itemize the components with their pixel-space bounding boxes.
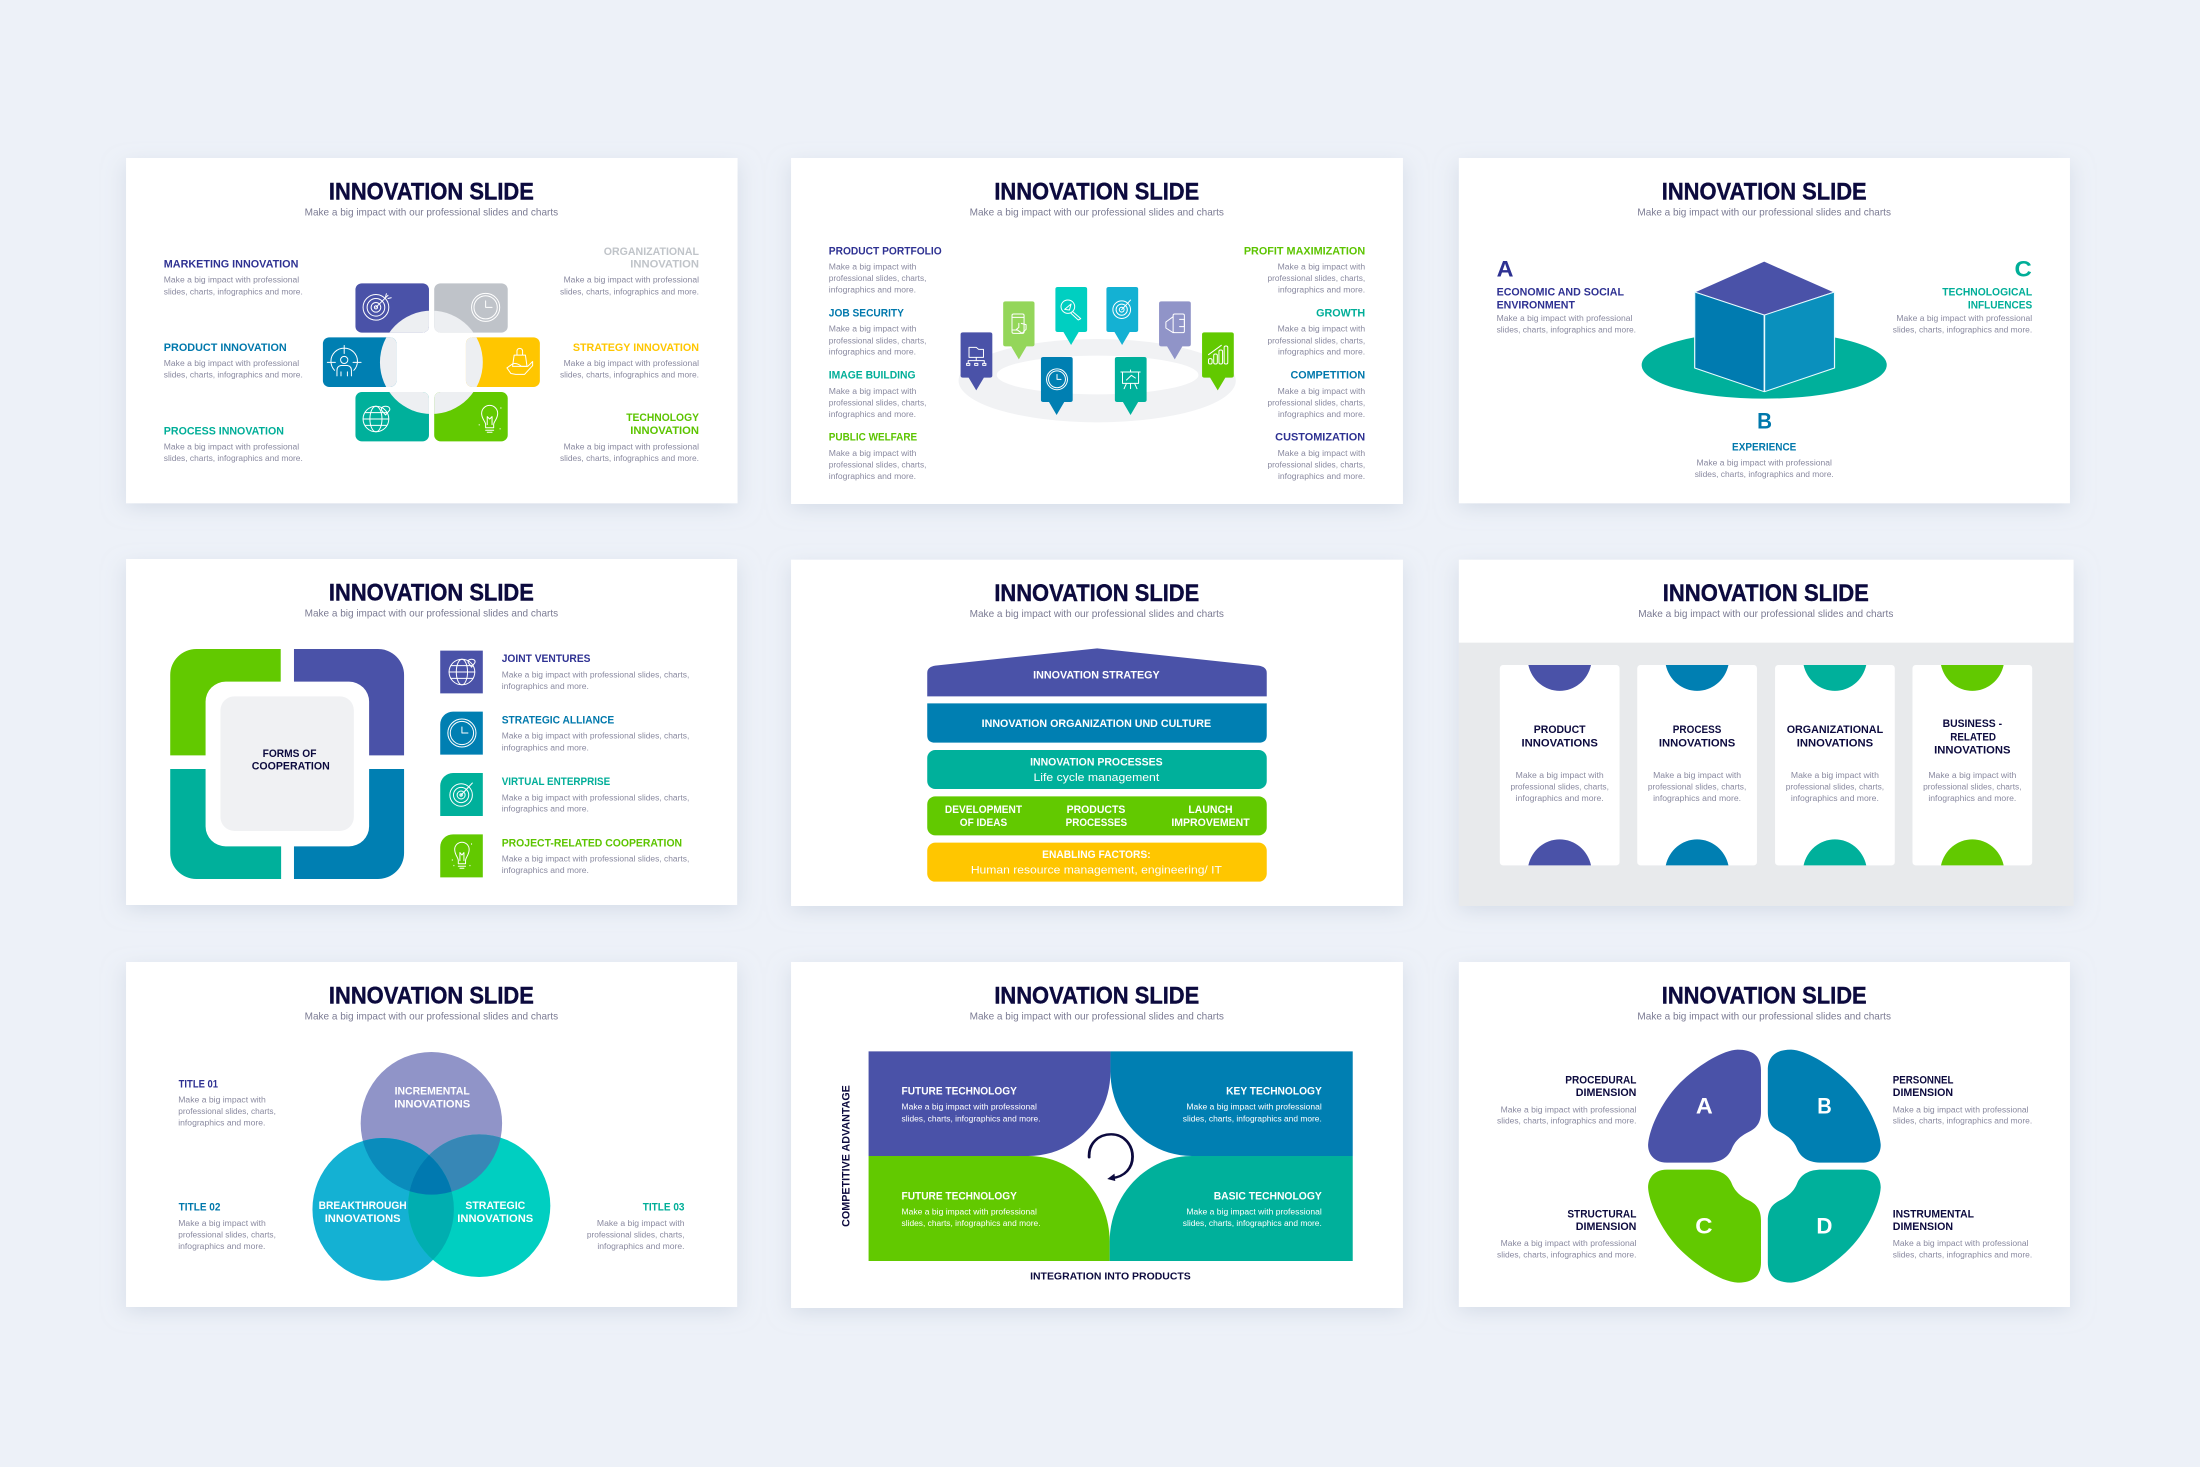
slide 5 card (791, 560, 1403, 906)
quadrant: basic technology: Make a big impact with professional (1186, 1207, 1322, 1216)
text block: profit maximization: Make a big impact with (1278, 262, 1365, 271)
text block: growth (1268, 306, 1365, 356)
text block: growth: Make a big impact with (1278, 324, 1365, 333)
quadrant: future technology top (869, 1051, 1110, 1156)
center box: forms of cooperation: COOPERATION (252, 760, 330, 772)
quadrant: future technology bottom: FUTURE TECHNOLOGY (902, 1189, 1017, 1202)
subtitle: Make a big impact with our professional slides and charts (970, 207, 1224, 218)
text block: procedural dimension (1497, 1073, 1637, 1125)
text block: C technological influences: C (2015, 258, 2032, 282)
quadrant: key technology: Make a big impact with professional (1186, 1102, 1322, 1111)
text block: A economic and social environment: Make a big impact with professional (1497, 314, 1632, 323)
text block: public welfare (829, 431, 926, 481)
title: INNOVATION SLIDE (329, 178, 534, 205)
petal A: A (1696, 1094, 1713, 1119)
panel: slide 5 innovation house (791, 560, 1403, 906)
title: INNOVATION SLIDE (1663, 579, 1869, 606)
text block: customization: CUSTOMIZATION (1275, 431, 1365, 443)
text block: title 03: TITLE 03 (643, 1201, 685, 1213)
card: organizational innovations: ORGANIZATIONAL (1787, 723, 1884, 736)
title: INNOVATION SLIDE (1662, 982, 1867, 1009)
band: development, products, launch: DEVELOPMENT (945, 803, 1023, 816)
text block: procedural dimension: PROCEDURAL (1565, 1073, 1637, 1086)
band: enabling factors (927, 843, 1267, 882)
card: business-related innovations: INNOVATIONS (1934, 743, 2010, 756)
text block: public welfare: Make a big impact with (829, 449, 916, 458)
pin: teal presentation board (1115, 357, 1147, 415)
band: development, products, launch (927, 796, 1267, 835)
center box: forms of cooperation: FORMS OF (263, 747, 316, 760)
card: process innovations: infographics and more. (1653, 794, 1741, 803)
quadrant: future technology top: FUTURE TECHNOLOGY (902, 1085, 1017, 1097)
pin: sky target (1106, 287, 1138, 345)
text block: title 02 (178, 1201, 276, 1251)
panel: slide 4 forms of cooperation (126, 559, 737, 905)
text block: title 02: Make a big impact with (178, 1219, 266, 1228)
text block: instrumental dimension: INSTRUMENTAL (1893, 1207, 1974, 1220)
text block: competition: professional slides, charts, (1268, 398, 1365, 407)
band: enabling factors: ENABLING FACTORS: (1042, 848, 1151, 861)
text block: organizational innovation: ORGANIZATIONAL (604, 245, 699, 258)
text block: image building: professional slides, charts, (829, 398, 926, 407)
quadrant: basic technology: slides, charts, infographics and more. (1183, 1219, 1322, 1228)
text block: A economic and social environment: slides, charts, infographics and more. (1497, 325, 1636, 334)
card: product innovations: infographics and more. (1516, 794, 1604, 803)
center box: forms of cooperation (220, 696, 354, 831)
text block: A economic and social environment: ECONOMIC AND SOCIAL (1497, 285, 1624, 298)
text block: product innovation (164, 341, 303, 379)
text block: marketing innovation: MARKETING INNOVATION (164, 258, 298, 270)
text block: title 01: Make a big impact with (178, 1095, 266, 1104)
subtitle: Make a big impact with our professional slides and charts (970, 1011, 1224, 1022)
text block: product portfolio: Make a big impact with (829, 262, 916, 271)
text block: process innovation (164, 424, 303, 463)
card: organizational innovations: professional slides, charts, (1786, 782, 1884, 791)
slide 4 card (126, 559, 737, 905)
text block: project-related cooperation: infographics and more. (502, 866, 589, 875)
text block: process innovation: Make a big impact with professional (164, 442, 299, 451)
pin: lavender hand holding phone (1159, 301, 1191, 359)
text block: A economic and social environment: ENVIRONMENT (1497, 298, 1575, 311)
band: development, products, launch: IMPROVEMENT (1171, 816, 1250, 829)
text block: technology innovation (560, 411, 699, 463)
text block: B experience (1695, 410, 1834, 479)
text block: title 03: professional slides, charts, (587, 1230, 685, 1239)
card: business-related innovations: Make a big impact with (1928, 771, 2016, 780)
icon tile: light bulb (440, 834, 483, 877)
icon: shopping bag on hand (507, 348, 533, 374)
text block: virtual enterprise: infographics and more. (502, 804, 589, 813)
card: process innovations: Make a big impact with (1653, 771, 1741, 780)
text block: virtual enterprise: VIRTUAL ENTERPRISE (502, 775, 610, 788)
roof: innovation strategy: INNOVATION STRATEGY (1033, 669, 1160, 681)
text block: strategic alliance: infographics and more. (502, 743, 589, 752)
cube (1695, 262, 1835, 392)
text block: B experience: Make a big impact with professional (1696, 458, 1832, 467)
icon: globe with pin (363, 406, 390, 432)
text block: B experience: EXPERIENCE (1732, 441, 1796, 453)
petal C: C (1695, 1214, 1713, 1239)
text block: profit maximization: professional slides, charts, (1268, 274, 1365, 283)
text block: public welfare: infographics and more. (829, 472, 916, 481)
base ellipse (1642, 331, 1887, 399)
text block: marketing innovation (164, 258, 303, 296)
band: innovation processes: INNOVATION PROCESSES (1030, 755, 1163, 768)
text block: strategic alliance (502, 714, 689, 752)
text block: product innovation: PRODUCT INNOVATION (164, 341, 287, 354)
text block: customization: professional slides, charts, (1268, 460, 1365, 469)
text block: image building: IMAGE BUILDING (829, 369, 916, 381)
text block: strategic alliance: STRATEGIC ALLIANCE (502, 714, 614, 726)
quadrant: key technology: slides, charts, infographics and more. (1183, 1114, 1322, 1123)
text block: structural dimension: slides, charts, infographics and more. (1497, 1250, 1636, 1259)
icon tile: globe (440, 651, 483, 693)
text block: product innovation: slides, charts, infographics and more. (164, 370, 303, 379)
quadrant: future technology bottom (869, 1156, 1110, 1261)
text block: profit maximization: PROFIT MAXIMIZATION (1244, 244, 1365, 257)
card: business-related innovations: RELATED (1950, 730, 1996, 743)
quadrant: key technology (1110, 1051, 1353, 1156)
text block: product innovation: Make a big impact with professional (164, 359, 299, 368)
panel: slide 3 cube (1459, 158, 2070, 503)
six tile ring diagram (323, 283, 540, 441)
panel: slide 9 four dimensions (1459, 962, 2070, 1307)
panel: slide 1 six innovation types (126, 158, 738, 503)
text block: title 03 (587, 1201, 685, 1251)
subtitle: Make a big impact with our professional slides and charts (1637, 207, 1891, 218)
text block: title 01: professional slides, charts, (178, 1107, 276, 1116)
roof: innovation strategy (927, 648, 1267, 696)
text block: B experience: slides, charts, infographics and more. (1695, 470, 1834, 479)
text block: B experience: B (1757, 410, 1772, 434)
slide 3 card (1459, 158, 2070, 503)
text block: process innovation: slides, charts, infographics and more. (164, 454, 303, 463)
text block: growth: infographics and more. (1278, 347, 1365, 356)
card: process innovations: PROCESS (1673, 723, 1721, 736)
icon: light bulb (479, 405, 501, 432)
card: organizational innovations: INNOVATIONS (1797, 736, 1873, 749)
card: product innovations: INNOVATIONS (1522, 736, 1598, 749)
text block: image building (829, 369, 926, 419)
slide 8 card (791, 962, 1403, 1308)
text block: joint ventures: Make a big impact with professional slides, charts, (502, 670, 689, 679)
card: process innovations (1637, 665, 1757, 865)
quadrant: future technology top: Make a big impact with professional (902, 1102, 1037, 1111)
slide 9 card (1459, 962, 2070, 1307)
text block: product portfolio: PRODUCT PORTFOLIO (829, 244, 942, 257)
title: INNOVATION SLIDE (994, 579, 1199, 606)
text block: product portfolio (829, 244, 942, 294)
card: business-related innovations (1912, 665, 2032, 865)
text block: title 02: infographics and more. (178, 1242, 265, 1251)
text block: public welfare: professional slides, charts, (829, 460, 926, 469)
text block: organizational innovation (560, 245, 699, 296)
petal D: D (1816, 1214, 1833, 1239)
text block: product portfolio: infographics and more. (829, 285, 916, 294)
text block: title 03: infographics and more. (597, 1242, 685, 1251)
panel: slide 6 four innovation cards (1459, 560, 2074, 906)
pin: cyan magnifier (1055, 287, 1087, 345)
text block: marketing innovation: Make a big impact with professional (164, 275, 299, 284)
icon tile: target (440, 773, 483, 816)
text block: image building: Make a big impact with (829, 387, 916, 396)
card: product innovations: PRODUCT (1534, 723, 1586, 736)
slide 6 card (1459, 560, 2074, 906)
card: business-related innovations: BUSINESS - (1943, 717, 2002, 730)
text block: customization (1268, 431, 1365, 481)
subtitle: Make a big impact with our professional slides and charts (1638, 609, 1894, 620)
quadrant: future technology top: slides, charts, infographics and more. (902, 1114, 1041, 1123)
text block: structural dimension: STRUCTURAL (1567, 1207, 1637, 1220)
text block: job security: JOB SECURITY (829, 306, 904, 319)
quadrant: basic technology (1110, 1156, 1353, 1261)
venn diagram: BREAKTHROUGH (319, 1199, 407, 1212)
text block: project-related cooperation: Make a big impact with professional slides, charts, (502, 854, 689, 863)
text block: technology innovation: Make a big impact with professional (564, 442, 699, 451)
text block: virtual enterprise (502, 775, 689, 813)
text block: A economic and social environment: A (1497, 258, 1514, 282)
text block: personnel dimension: slides, charts, infographics and more. (1893, 1116, 2032, 1125)
text block: C technological influences: slides, charts, infographics and more. (1893, 325, 2032, 334)
petal D (1768, 1170, 1881, 1283)
text block: virtual enterprise: Make a big impact with professional slides, charts, (502, 793, 689, 802)
text block: strategy innovation: slides, charts, infographics and more. (560, 370, 699, 379)
petal B: B (1817, 1094, 1832, 1119)
text block: title 02: TITLE 02 (179, 1201, 221, 1213)
text block: instrumental dimension: DIMENSION (1893, 1220, 1953, 1233)
text block: personnel dimension: Make a big impact with professional (1893, 1105, 2029, 1114)
quadrant: future technology bottom: slides, charts, infographics and more. (902, 1219, 1041, 1228)
text block: structural dimension: DIMENSION (1576, 1220, 1636, 1233)
text block: organizational innovation: slides, charts, infographics and more. (560, 287, 699, 296)
text block: joint ventures: infographics and more. (502, 682, 589, 691)
text block: competition (1268, 369, 1365, 419)
white header band (1459, 560, 2074, 643)
text block: technology innovation: INNOVATION (630, 424, 699, 437)
text block: title 01: TITLE 01 (179, 1077, 218, 1090)
grey ring (959, 339, 1236, 422)
text block: procedural dimension: slides, charts, infographics and more. (1497, 1116, 1636, 1125)
subtitle: Make a big impact with our professional slides and charts (305, 608, 559, 619)
pin: indigo folder network (961, 332, 992, 390)
text block: joint ventures (502, 652, 689, 691)
card: organizational innovations (1775, 665, 1895, 865)
icon: person in crosshair (327, 346, 361, 376)
text block: competition: infographics and more. (1278, 410, 1365, 419)
text block: job security (829, 306, 926, 356)
card: business-related innovations: infographics and more. (1928, 794, 2016, 803)
text block: personnel dimension: DIMENSION (1893, 1086, 1953, 1099)
text block: public welfare: PUBLIC WELFARE (829, 431, 917, 443)
card: organizational innovations: Make a big impact with (1791, 771, 1879, 780)
title: INNOVATION SLIDE (994, 178, 1199, 205)
venn diagram (312, 1052, 550, 1281)
text block: procedural dimension: DIMENSION (1576, 1086, 1636, 1099)
slide 7 card (126, 962, 737, 1307)
text block: strategy innovation: STRATEGY INNOVATION (573, 341, 699, 354)
title: INNOVATION SLIDE (994, 982, 1199, 1009)
text block: competition: COMPETITION (1290, 369, 1365, 381)
text block: growth: professional slides, charts, (1268, 336, 1365, 345)
text block: structural dimension (1497, 1207, 1637, 1259)
petal B (1768, 1050, 1881, 1163)
text block: A economic and social environment (1497, 258, 1636, 334)
title: INNOVATION SLIDE (329, 579, 534, 606)
venn diagram: INNOVATIONS (394, 1097, 470, 1110)
card: product innovations: Make a big impact with (1516, 771, 1604, 780)
card: process innovations: professional slides, charts, (1648, 782, 1746, 791)
subtitle: Make a big impact with our professional slides and charts (1637, 1011, 1891, 1022)
frame quadrants (170, 649, 404, 879)
text block: instrumental dimension: Make a big impact with professional (1893, 1239, 2029, 1248)
quadrant: basic technology: BASIC TECHNOLOGY (1214, 1189, 1322, 1202)
venn diagram: INCREMENTAL (395, 1085, 470, 1097)
text block: project-related cooperation: PROJECT-RELATED COOPERATION (502, 836, 682, 849)
card: organizational innovations: infographics and more. (1791, 794, 1879, 803)
text block: strategic alliance: Make a big impact with professional slides, charts, (502, 731, 689, 740)
panel: slide 7 venn diagram (126, 962, 737, 1307)
text block: personnel dimension (1893, 1073, 2032, 1125)
card: business-related innovations: professional slides, charts, (1923, 782, 2022, 791)
text block: title 03: Make a big impact with (597, 1219, 685, 1228)
text block: instrumental dimension (1893, 1207, 2032, 1259)
band: innovation processes: Life cycle management (1034, 771, 1160, 784)
text block: C technological influences: TECHNOLOGICAL (1942, 285, 2033, 298)
text block: instrumental dimension: slides, charts, infographics and more. (1893, 1250, 2032, 1259)
vertical axis label: COMPETITIVE ADVANTAGE (841, 1085, 853, 1227)
text block: profit maximization (1244, 244, 1365, 294)
text block: organizational innovation: Make a big impact with professional (564, 275, 699, 284)
icon: target (363, 294, 391, 320)
subtitle: Make a big impact with our professional slides and charts (305, 1011, 559, 1022)
panel: slide 8 technology matrix (791, 962, 1403, 1308)
band: enabling factors: Human resource management, engineering/ IT (971, 864, 1222, 876)
venn diagram: STRATEGIC (465, 1199, 525, 1212)
text block: strategy innovation: Make a big impact with professional (564, 359, 699, 368)
band: development, products, launch: PROCESSES (1066, 816, 1127, 829)
venn diagram: INNOVATIONS (325, 1212, 401, 1225)
band: organization and culture: INNOVATION ORGANIZATION UND CULTURE (982, 717, 1211, 730)
text block: organizational innovation: INNOVATION (630, 258, 699, 270)
title: INNOVATION SLIDE (1662, 178, 1867, 205)
band: development, products, launch: OF IDEAS (960, 816, 1007, 829)
text block: title 02: professional slides, charts, (178, 1230, 276, 1239)
text block: process innovation: PROCESS INNOVATION (164, 424, 284, 437)
text block: image building: infographics and more. (829, 410, 916, 419)
text block: project-related cooperation (502, 836, 689, 875)
text block: job security: Make a big impact with (829, 324, 916, 333)
band: innovation processes (927, 750, 1267, 789)
icon tile: clock (440, 712, 483, 755)
text block: strategy innovation (560, 341, 699, 379)
text block: customization: Make a big impact with (1278, 449, 1365, 458)
text block: title 01 (178, 1077, 276, 1127)
text block: customization: infographics and more. (1278, 472, 1365, 481)
venn diagram: INNOVATIONS (457, 1212, 533, 1225)
text block: C technological influences (1893, 258, 2033, 334)
panel: slide 2 ring of pins (791, 158, 1403, 504)
text block: product portfolio: professional slides, charts, (829, 274, 926, 283)
text block: C technological influences: INFLUENCES (1968, 298, 2032, 311)
text block: C technological influences: Make a big impact with professional (1896, 314, 2032, 323)
pin: blue clock (1041, 357, 1073, 415)
text block: procedural dimension: Make a big impact with professional (1501, 1105, 1636, 1114)
petal A (1648, 1050, 1761, 1163)
title: INNOVATION SLIDE (329, 982, 534, 1009)
text block: technology innovation: slides, charts, infographics and more. (560, 454, 699, 463)
pin: green bar chart (1202, 332, 1234, 390)
card: process innovations: INNOVATIONS (1659, 736, 1735, 749)
card: product innovations: professional slides, charts, (1510, 782, 1609, 791)
icon: clock (472, 293, 500, 321)
card: product innovations (1500, 665, 1620, 865)
text block: job security: infographics and more. (829, 347, 916, 356)
icon: circular arrow (1089, 1134, 1133, 1181)
band: organization and culture (927, 703, 1267, 743)
text block: marketing innovation: slides, charts, infographics and more. (164, 287, 303, 296)
text block: technology innovation: TECHNOLOGY (626, 411, 699, 424)
text block: title 01: infographics and more. (178, 1118, 265, 1127)
subtitle: Make a big impact with our professional slides and charts (970, 609, 1224, 620)
slide 2 card (791, 158, 1403, 504)
text block: joint ventures: JOINT VENTURES (502, 652, 590, 665)
text block: structural dimension: Make a big impact with professional (1501, 1239, 1636, 1248)
band: development, products, launch: LAUNCH (1188, 803, 1233, 816)
text block: competition: Make a big impact with (1278, 387, 1365, 396)
text block: job security: professional slides, charts, (829, 336, 926, 345)
band: development, products, launch: PRODUCTS (1067, 803, 1125, 816)
slide 1 card (126, 158, 738, 503)
subtitle: Make a big impact with our professional slides and charts (305, 207, 559, 218)
horizontal axis label: INTEGRATION INTO PRODUCTS (1030, 1272, 1191, 1282)
quadrant: future technology bottom: Make a big impact with professional (902, 1207, 1037, 1216)
petal C (1648, 1170, 1761, 1283)
pin: light green phone (1003, 301, 1035, 359)
text block: personnel dimension: PERSONNEL (1893, 1073, 1954, 1086)
quadrant: key technology: KEY TECHNOLOGY (1226, 1085, 1322, 1097)
text block: growth: GROWTH (1316, 306, 1365, 319)
text block: profit maximization: infographics and more. (1278, 285, 1365, 294)
